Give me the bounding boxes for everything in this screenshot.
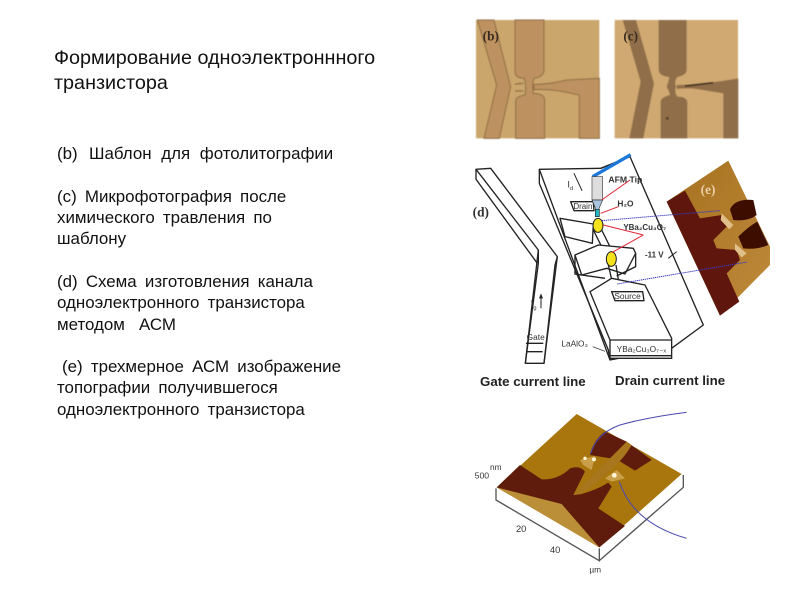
drain current line: I (567, 179, 570, 189)
AFM tip and cantilever (592, 155, 631, 217)
dashed projection lines (602, 211, 747, 284)
panel e: AFM image inset (602, 161, 770, 316)
drain current line: LaAlO₃ (561, 339, 588, 349)
panel d: AFM fabrication schematic (473, 155, 703, 363)
yellow oxide dots (593, 218, 616, 266)
scale labels: 40 (550, 545, 560, 555)
schematic labels: AFM Tip (608, 174, 642, 184)
caption c: шаблону (57, 229, 127, 248)
axes box (496, 475, 683, 561)
caption d: АСМ (139, 315, 176, 334)
gate current line (476, 168, 557, 363)
scale labels: 500 (475, 471, 489, 481)
panel c: micrograph after chemical etching: (c) (623, 28, 638, 43)
schematic labels: YBa₂Cu₃O₇ (623, 223, 666, 232)
caption d: методом (57, 315, 125, 334)
caption c (57, 187, 286, 248)
surface (497, 414, 682, 547)
scale labels: 20 (516, 524, 526, 534)
schematic labels: -11 V (645, 250, 664, 259)
title: Формирование одноэлектроннного (54, 47, 375, 69)
caption d: (d) Схема изготовления канала (57, 272, 313, 291)
gate current line: I (531, 299, 533, 309)
caption e: одноэлектронного транзистора (57, 400, 305, 419)
drain current line: YBa₂Cu₃O₇₋ₓ (617, 344, 666, 354)
caption d (57, 272, 313, 334)
panel b: photolithography template micrograph: (b) (483, 28, 499, 43)
caption c: химического травления по (57, 208, 272, 227)
caption c: (c) Микрофотография после (57, 187, 286, 206)
caption e: (e) трехмерное АСМ изображение (62, 357, 341, 376)
scale labels: µm (589, 564, 601, 574)
drain current line: Source (614, 291, 641, 301)
title: транзистора (54, 72, 168, 94)
panel c: micrograph after chemical etching (615, 20, 738, 138)
schematic labels: H₂O (617, 199, 634, 209)
schematic labels (608, 174, 677, 259)
drain current line: Drain (573, 202, 592, 211)
caption b: (b) (57, 144, 78, 163)
panel d: AFM fabrication schematic: (d) (473, 205, 489, 220)
blue wires (591, 412, 687, 538)
text block: figure captions (57, 144, 341, 419)
label: gate current line: Gate current line (480, 374, 586, 389)
gate current line: Gate (527, 332, 545, 342)
axis labels under schematic (480, 373, 725, 389)
caption e: топографии получившегося (57, 378, 278, 397)
label: drain current line: Drain current line (615, 373, 725, 388)
red pointer arrows (601, 180, 643, 253)
title (54, 47, 375, 94)
scale labels: nm (490, 462, 502, 472)
caption e (57, 357, 341, 419)
panel e: AFM image inset: (e) (701, 182, 715, 197)
drain current line: d (570, 186, 573, 192)
drain current line (539, 157, 703, 360)
caption d: одноэлектронного транзистора (57, 293, 305, 312)
3D AFM topography chart (475, 412, 687, 574)
panel b: photolithography template micrograph (476, 20, 599, 138)
caption b: Шаблон для фотолитографии (89, 144, 333, 163)
scale labels (475, 462, 601, 574)
gate current line: g (533, 305, 536, 311)
